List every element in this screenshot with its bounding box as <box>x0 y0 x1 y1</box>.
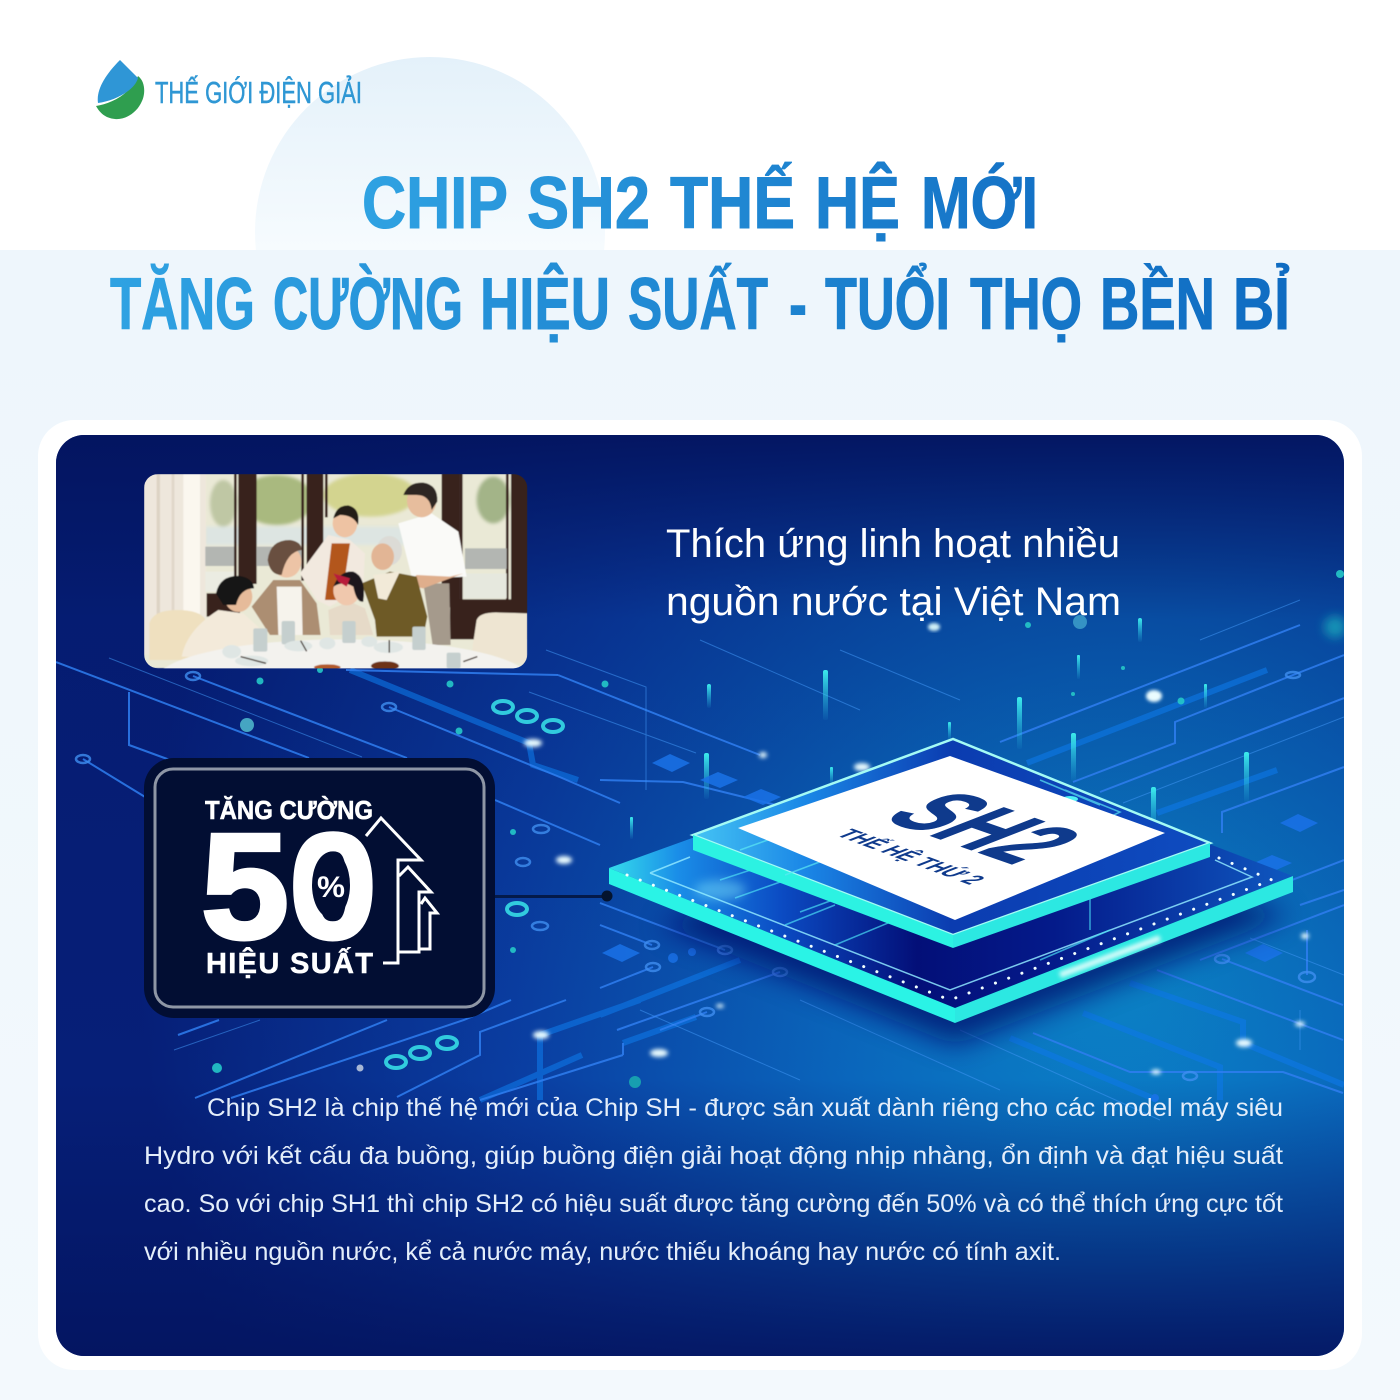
body text <box>144 1094 1283 1266</box>
icon: rising arrows <box>366 818 437 963</box>
title: CHIP <box>362 163 508 244</box>
circuit pads <box>602 754 1318 1102</box>
heading: water source adaptability: nguồn nước tại Việt Nam <box>666 580 1121 624</box>
title: SH2 <box>527 163 650 244</box>
title: BỈ <box>1233 264 1290 345</box>
title: THẾ <box>670 163 795 244</box>
white die <box>738 756 1165 920</box>
title: BỀN <box>1100 264 1215 345</box>
glow lights <box>524 623 1309 1074</box>
panel: circuit background <box>56 435 1346 1356</box>
title: MỚI <box>921 163 1038 244</box>
lower chip plate <box>609 745 1293 1023</box>
badge: 50% performance: TĂNG CƯỜNG <box>205 795 373 825</box>
chip <box>609 739 1293 1045</box>
panel: white card frame <box>38 420 1362 1370</box>
body text: cao. So với chip SH1 thì chip SH2 có hiệu suất được tăng cường đến 50% và có thể thích ứng cực tốt <box>144 1190 1283 1218</box>
title: THỌ <box>970 264 1082 345</box>
badge: 50% performance <box>144 758 495 1018</box>
heading: water source adaptability <box>666 522 1121 624</box>
SH2 label: SH2 <box>857 782 1109 874</box>
title: TĂNG <box>110 264 255 345</box>
body text: Chip SH2 là chip thế hệ mới của Chip SH - được sản xuất dành riêng cho các model máy siêu <box>207 1094 1283 1122</box>
connector line <box>494 890 612 902</box>
logo: Thế Giới Điện Giải <box>96 60 362 119</box>
pads and rings <box>386 701 563 1068</box>
title <box>110 163 1290 345</box>
teal dots <box>212 570 1346 1088</box>
title: CƯỜNG <box>273 264 463 345</box>
body text: với nhiều nguồn nước, kể cả nước máy, nước thiếu khoáng hay nước có tính axit. <box>144 1238 1061 1266</box>
photo: family at dining table <box>144 474 528 668</box>
title: SUẤT <box>628 264 768 345</box>
title: TUỔI <box>825 264 950 345</box>
upper chip plate <box>693 739 1210 948</box>
title: HIỆU <box>480 264 610 345</box>
chip shadow <box>660 800 1290 1045</box>
heading: water source adaptability: Thích ứng linh hoạt nhiều <box>666 522 1120 566</box>
badge: 50% performance: % <box>317 871 345 904</box>
vertical light bars <box>630 618 1249 839</box>
badge: 50% performance: 50 <box>201 802 377 970</box>
logo: Thế Giới Điện Giải: THẾ GIỚI ĐIỆN GIẢI <box>155 75 362 110</box>
badge: 50% performance: HIỆU SUẤT <box>206 946 373 980</box>
body text: Hydro với kết cấu đa buồng, giúp buồng điện giải hoạt động nhịp nhàng, ổn định và đạt hiệu suất <box>144 1142 1283 1170</box>
generation label: THẾ HỆ THỨ 2 <box>829 826 993 887</box>
title: HỆ <box>815 163 900 244</box>
title: - <box>789 264 807 345</box>
